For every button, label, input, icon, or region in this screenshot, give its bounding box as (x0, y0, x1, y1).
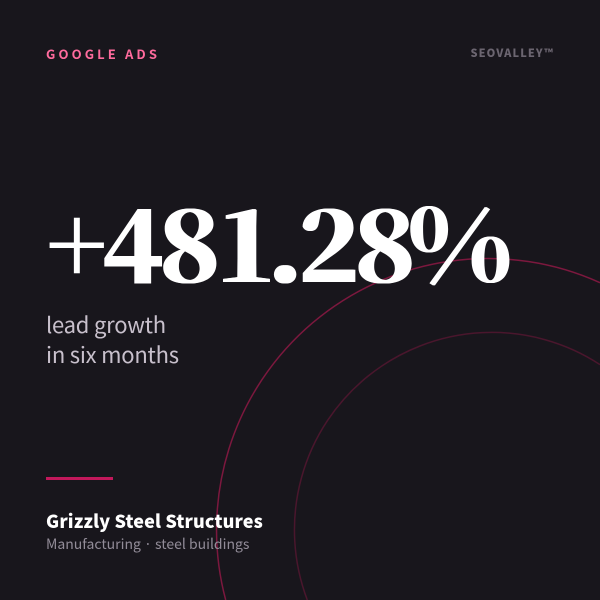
metric description: lead growth (46, 308, 166, 340)
headline metric: +481.28 (46, 167, 407, 311)
brand mark: SEOVALLEY™ (470, 45, 554, 61)
accent rule (46, 477, 113, 480)
category label: GOOGLE ADS (46, 44, 160, 63)
metric description: in six months (46, 338, 179, 370)
client name: Grizzly Steel Structures (46, 508, 263, 534)
headline metric: % (407, 167, 508, 311)
metric description (46, 308, 179, 370)
client sector: Manufacturing · steel buildings (46, 534, 249, 554)
